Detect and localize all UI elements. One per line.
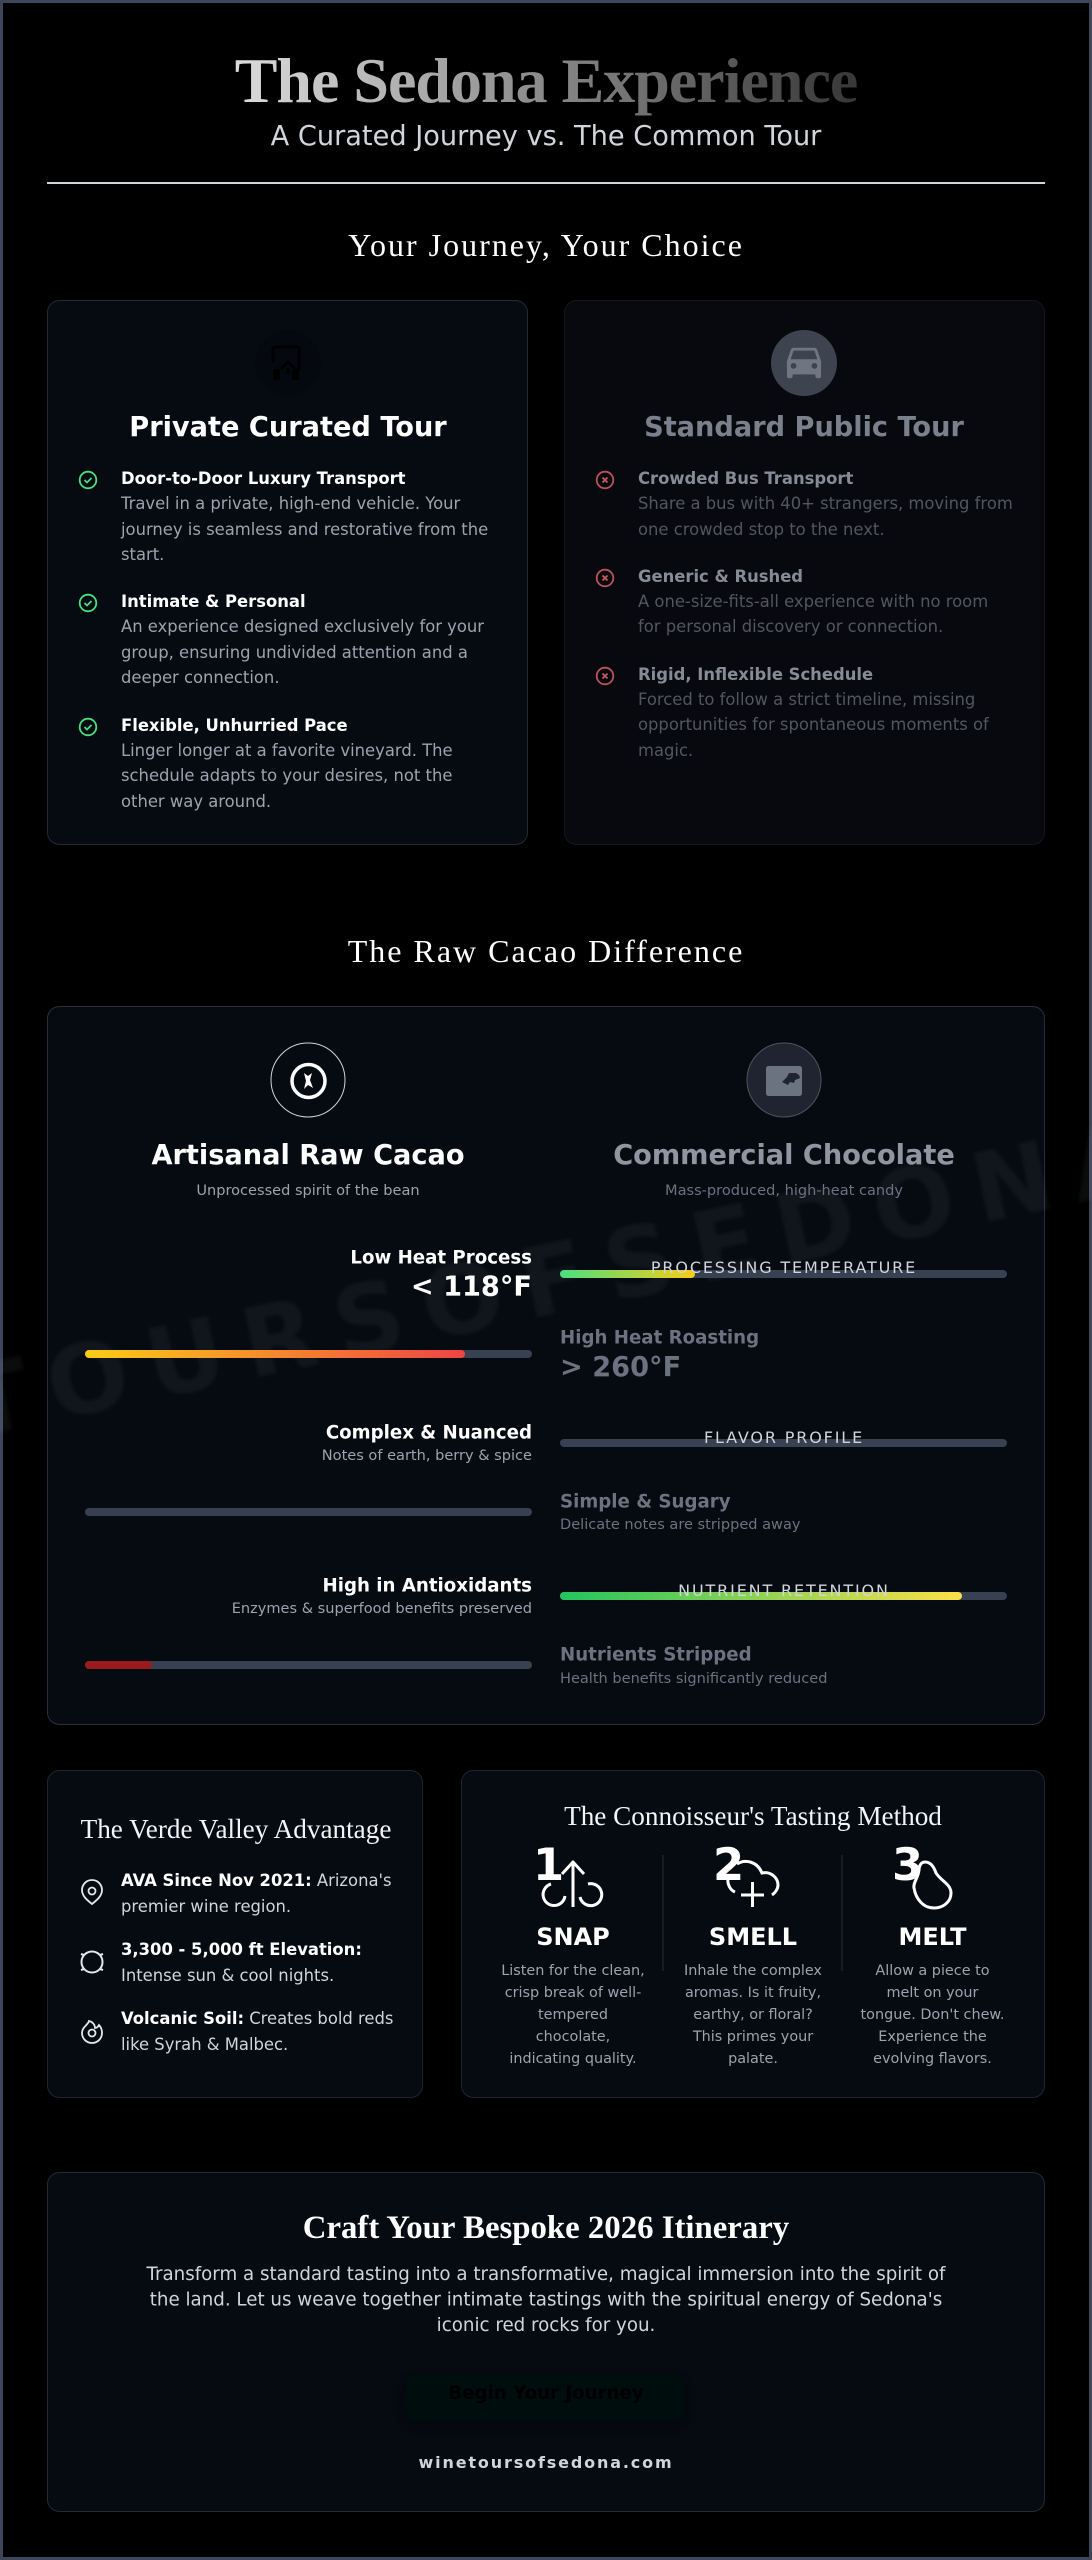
step: melt [861, 1838, 1004, 2067]
step: smell: This primes your [692, 2029, 813, 2045]
item: door to door: Travel in a private, high-end vehicle. Your [120, 494, 460, 513]
cta text: iconic red rocks for you. [437, 2315, 655, 2336]
item: door to door: start. [121, 545, 164, 564]
item: flexible: other way around. [121, 792, 271, 811]
item: flexible: schedule adapts to your desires, not the [121, 766, 452, 785]
item: crowded bus: one crowded stop to the next. [638, 520, 885, 539]
card title: Private Curated Tour [129, 412, 447, 443]
step: smell: SMELL [709, 1923, 797, 1951]
step: snap: 1 [533, 1838, 564, 1891]
panel title: The Connoisseur's Tasting Method [564, 1801, 942, 1831]
item: rigid: opportunities for spontaneous moments of [638, 715, 990, 734]
row: nutrients: Nutrients Stripped [560, 1644, 752, 1666]
step: smell: 2 [713, 1838, 744, 1891]
row: nutrients: Health benefits significantly reduced [560, 1670, 827, 1687]
fact: soil: Volcanic Soil: Creates bold reds [121, 2009, 393, 2028]
step: snap: Listen for the clean, [501, 1963, 645, 1979]
card title: Standard Public Tour [644, 412, 964, 443]
item: intimate: Intimate & Personal [121, 592, 306, 611]
step: snap: SNAP [536, 1923, 610, 1951]
panel: call to action [48, 2172, 1044, 2512]
row: temperature: > 260°F [560, 1352, 681, 1383]
item: rigid: Rigid, Inflexible Schedule [638, 665, 873, 684]
step: snap: tempered [538, 2007, 608, 2023]
cta text: Transform a standard tasting into a transformative, magical immersion into the spirit of [146, 2264, 946, 2285]
panel title: The Verde Valley Advantage [81, 1814, 391, 1844]
row: temperature: < 118°F [411, 1272, 532, 1302]
step: melt: melt on your [887, 1985, 979, 2001]
step: smell [684, 1838, 822, 2067]
row: temperature: PROCESSING TEMPERATURE [651, 1258, 917, 1277]
step: melt: Allow a piece to [875, 1963, 990, 1979]
item: intimate [80, 592, 484, 687]
column title: Commercial Chocolate [613, 1140, 955, 1171]
step: snap: chocolate, [536, 2029, 610, 2045]
heading: your journey: Your Journey, Your Choice [348, 227, 744, 263]
row: nutrients: Enzymes & superfood benefits preserved [232, 1600, 532, 1617]
item: door to door: journey is seamless and restorative from the [120, 520, 488, 539]
item: intimate: group, ensuring undivided attention and a [121, 643, 468, 662]
row: temperature: Low Heat Process [350, 1248, 532, 1268]
subtitle: A Curated Journey vs. The Common Tour [271, 121, 822, 152]
item: rigid: Forced to follow a strict timeline, missing [638, 690, 975, 709]
fact: AVA [82, 1871, 392, 1916]
cta title: Craft Your Bespoke 2026 Itinerary [303, 2210, 790, 2246]
row: flavor: FLAVOR PROFILE [704, 1428, 864, 1447]
header [235, 45, 857, 152]
cta text [146, 2264, 946, 2336]
panel: standard public tour [564, 300, 1044, 844]
item: intimate: deeper connection. [121, 668, 280, 687]
panel: tasting method [462, 1770, 1044, 2098]
column subtitle: Unprocessed spirit of the bean [196, 1182, 420, 1199]
cta text: the land. Let us weave together intimate tastings with the spiritual energy of Sedona's [150, 2290, 942, 2310]
panel: private curated tour [48, 300, 528, 844]
fact: soil: like Syrah & Malbec. [121, 2035, 288, 2054]
step: smell: palate. [728, 2051, 778, 2067]
item: crowded bus: Crowded Bus Transport [638, 469, 853, 488]
row: temperature: High Heat Roasting [560, 1328, 759, 1348]
row: temperature [85, 1248, 1007, 1383]
panel: raw cacao comparison background [48, 1006, 1044, 1724]
title: The Sedona Experience [235, 45, 857, 116]
fact: elevation: 3,300 - 5,000 ft Elevation: [121, 1940, 362, 1959]
fact: AVA: AVA Since Nov 2021: Arizona's [121, 1871, 392, 1890]
step: snap [501, 1838, 645, 2067]
item: intimate: An experience designed exclusively for your [121, 617, 484, 636]
icon: cacao bean [271, 1043, 345, 1117]
website: winetoursofsedona.com [418, 2453, 674, 2472]
step: smell: Inhale the complex [684, 1963, 822, 1979]
comparison: raw cacao vs commercial [85, 1043, 1007, 1687]
row: flavor: Complex & Nuanced [326, 1422, 532, 1444]
step: smell: aromas. Is it fruity, [685, 1985, 821, 2001]
item: generic: A one-size-fits-all experience with no room [638, 592, 988, 611]
panel: verde valley [48, 1770, 422, 2098]
item: crowded bus: Share a bus with 40+ strangers, moving from [638, 494, 1013, 513]
button [406, 2373, 684, 2420]
step: snap: crisp break of well- [505, 1985, 641, 2001]
step: melt: Experience the [878, 2029, 987, 2045]
row: nutrients: NUTRIENT RETENTION [678, 1581, 890, 1600]
item: generic [597, 567, 988, 636]
step: melt: 3 [892, 1838, 923, 1891]
item: flexible: Linger longer at a favorite vineyard. The [121, 741, 453, 760]
item: door to door [80, 469, 488, 564]
row: flavor: Delicate notes are stripped away [560, 1516, 801, 1533]
step: melt: tongue. Don't chew. [861, 2007, 1004, 2023]
row: flavor: Notes of earth, berry & spice [322, 1447, 532, 1464]
fact: soil [82, 2009, 393, 2054]
heading: raw cacao: The Raw Cacao Difference [348, 933, 744, 969]
fact: AVA: premier wine region. [121, 1897, 291, 1916]
icon: private vehicle [255, 330, 321, 396]
icon: chocolate bar [747, 1043, 821, 1117]
step: snap: indicating quality. [509, 2051, 637, 2067]
item: rigid [597, 665, 990, 760]
step: smell: earthy, or floral? [693, 2007, 813, 2023]
column subtitle: Mass-produced, high-heat candy [665, 1182, 903, 1199]
step: melt: MELT [899, 1923, 967, 1951]
column title: Artisanal Raw Cacao [151, 1140, 465, 1171]
button: Begin Your Journey [448, 2383, 644, 2404]
row: nutrients: High in Antioxidants [323, 1576, 532, 1596]
item: flexible [80, 716, 453, 811]
step: melt: evolving flavors. [873, 2051, 992, 2067]
fact: elevation [81, 1940, 362, 1985]
item: generic: Generic & Rushed [638, 567, 803, 586]
item: door to door: Door-to-Door Luxury Transport [121, 469, 406, 488]
row: nutrients [85, 1576, 1007, 1687]
fact: elevation: Intense sun & cool nights. [121, 1966, 334, 1985]
item: crowded bus [597, 469, 1013, 539]
item: generic: for personal discovery or connection. [638, 617, 943, 636]
item: flexible: Flexible, Unhurried Pace [121, 716, 348, 735]
row: flavor [85, 1422, 1007, 1533]
item: rigid: magic. [638, 741, 693, 760]
icon: car [771, 330, 837, 396]
row: flavor: Simple & Sugary [560, 1492, 731, 1512]
